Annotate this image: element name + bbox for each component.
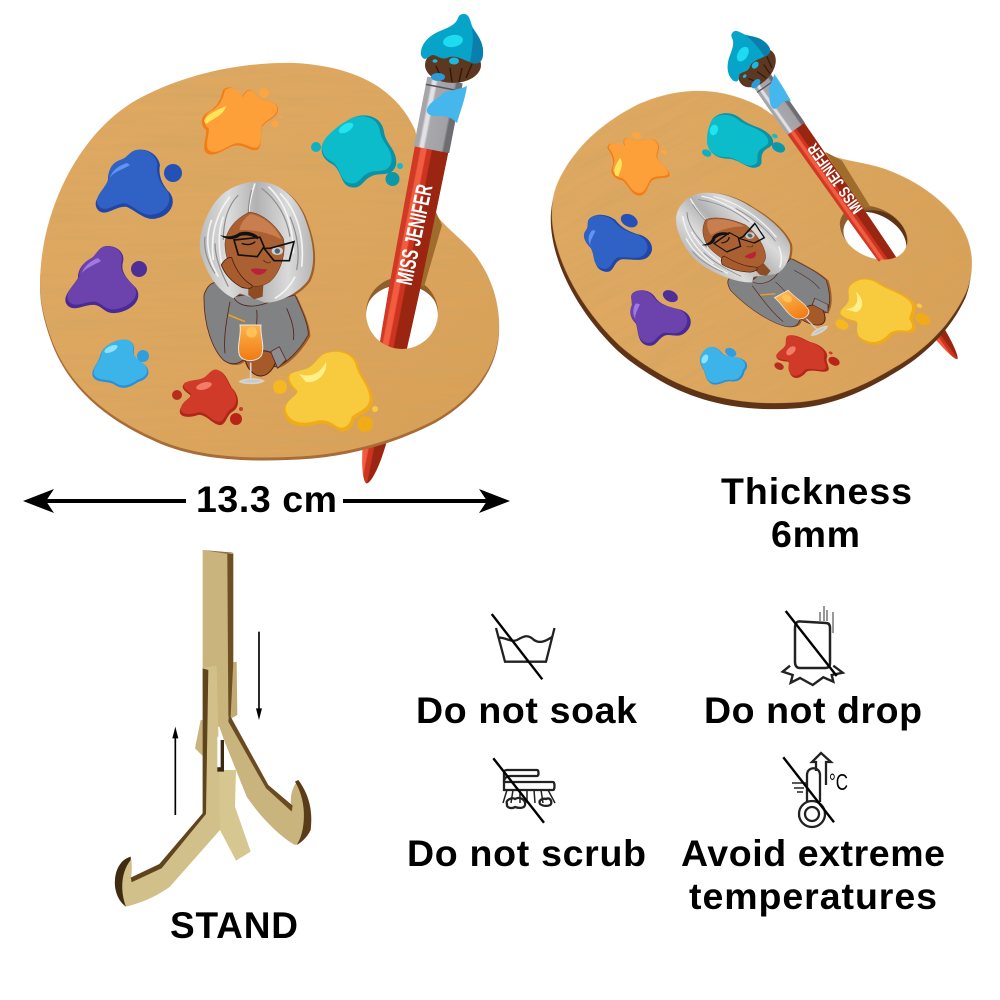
care item: do not scrub: Do not scrub: [407, 832, 646, 874]
paint blob: blue: [96, 150, 182, 219]
care item: do not scrub: [407, 758, 646, 874]
brush shadow on board: [414, 208, 442, 287]
drink glass: [229, 315, 245, 322]
width dimension arrow: [23, 478, 510, 520]
care item: do not drop: [704, 606, 922, 731]
hand on cheek: [221, 257, 252, 288]
panel: stand: [115, 550, 311, 946]
face: [225, 212, 284, 286]
palette edge shadow: [40, 66, 499, 461]
arrow up: [172, 727, 178, 815]
eyelash and brow: [220, 232, 259, 239]
stand illustration: [115, 550, 311, 907]
cut edge: [202, 183, 315, 368]
care item: do not soak: [416, 614, 637, 731]
stand label: STAND: [170, 905, 298, 946]
care item: do not soak: Do not soak: [416, 689, 637, 731]
brush name text: MISS JENIFER: [805, 140, 867, 216]
icon: falling phone crossed: [783, 606, 843, 685]
brush name text: MISS JENIFER: [391, 182, 437, 287]
panel: palette angled view: [467, 21, 1000, 462]
palette board: [40, 63, 499, 458]
care item: avoid extreme temperatures: Avoid extreme: [681, 832, 945, 874]
brush handle behind palette: [350, 145, 448, 487]
sweater: [204, 283, 308, 367]
hole inner wall: [366, 277, 438, 313]
palette artwork angled: [468, 33, 1000, 456]
icon: wash tub crossed: [492, 614, 554, 679]
care item: avoid extreme temperatures: temperatures: [689, 875, 937, 917]
thickness label: Thickness: [721, 470, 912, 512]
paint blob: purple: [65, 246, 147, 313]
brush upper part over palette: [379, 77, 467, 338]
thickness label: [721, 470, 912, 555]
nose: [263, 260, 271, 263]
paint blob: orange: [202, 87, 282, 155]
width label: 13.3 cm: [196, 478, 337, 520]
neck: [248, 285, 263, 299]
hand holding glass: [245, 351, 276, 376]
sleeve cuff: [271, 347, 286, 368]
icon: thermometer crossed: [783, 753, 834, 827]
sweater collar: [233, 293, 275, 306]
panel: palette front view: [40, 14, 499, 487]
hair: [200, 182, 313, 303]
open eye: [272, 247, 283, 255]
forehead highlight: [239, 214, 281, 239]
icon: scrub brush crossed: [493, 758, 555, 823]
degree symbol: °C: [829, 769, 848, 795]
care item: do not drop: Do not drop: [704, 689, 922, 731]
care item: avoid extreme temperatures: [681, 753, 945, 917]
palette thickness edge: [467, 39, 1000, 462]
character: woman with drink: [200, 182, 315, 383]
brush handle behind palette: [762, 118, 991, 369]
brush upper part over palette: [734, 68, 916, 267]
paint blob: light blue: [92, 339, 149, 388]
paint blob: red: [172, 370, 243, 425]
palette artwork: [40, 63, 499, 458]
paint blob: yellow: [273, 351, 378, 432]
brush head: [421, 14, 483, 83]
brush head: [709, 21, 784, 97]
paint blob: teal: [311, 115, 403, 188]
arrow down: [256, 632, 262, 720]
lips: [251, 268, 267, 275]
thickness label: 6mm: [771, 513, 860, 555]
glasses: [234, 237, 294, 261]
